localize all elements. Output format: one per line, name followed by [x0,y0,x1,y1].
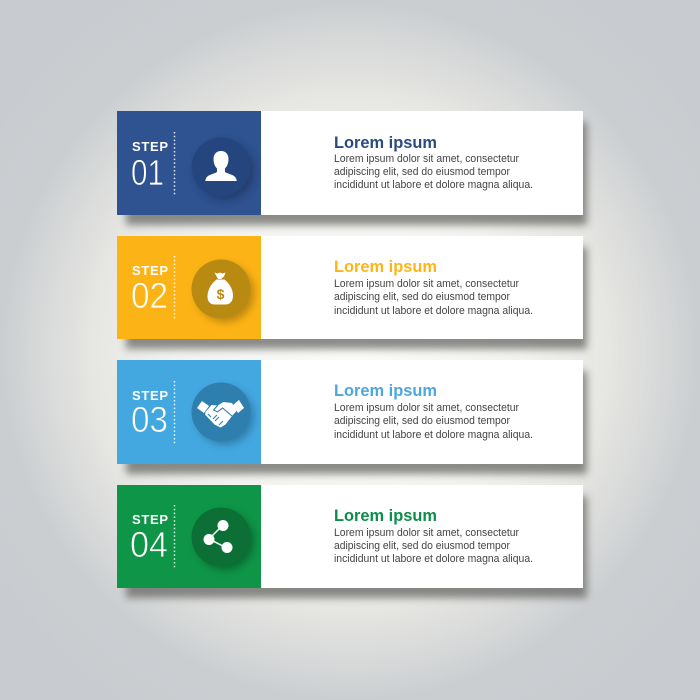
body text 4: incididunt ut labore et dolore magna aliqua. [334,553,533,565]
step label 1: STEP [132,139,168,154]
step label 3: STEP [132,388,168,403]
body text 2 [334,278,533,317]
body text 1: adipiscing elit, sed do eiusmod tempor [334,166,510,178]
body text 3: incididunt ut labore et dolore magna aliqua. [334,429,533,441]
body text 3: Lorem ipsum dolor sit amet, consectetur [334,402,519,414]
body text 1: incididunt ut labore et dolore magna aliqua. [334,179,533,191]
step number 3: 03 [131,399,168,440]
panel: step 3 [117,360,587,474]
icon: money bag [208,272,233,304]
icon: person [205,151,237,181]
heading 1: Lorem ipsum [334,133,437,152]
step number 2: 02 [131,275,168,316]
body text 3: adipiscing elit, sed do eiusmod tempor [334,415,510,427]
body text 4: Lorem ipsum dolor sit amet, consectetur [334,527,519,539]
step number 4: 04 [130,524,168,565]
body text 4 [334,527,533,565]
body text 2: incididunt ut labore et dolore magna aliqua. [334,305,533,317]
icon: handshake [197,400,244,428]
body text 1 [334,153,533,191]
heading 3: Lorem ipsum [334,381,437,400]
heading 2: Lorem ipsum [334,257,437,276]
body text 2: adipiscing elit, sed do eiusmod tempor [334,291,510,303]
step label 4: STEP [132,512,168,527]
icon: money bag: $ [217,286,225,302]
body text 2: Lorem ipsum dolor sit amet, consectetur [334,278,519,290]
panel: step 4 [117,485,587,598]
heading 4: Lorem ipsum [334,506,437,525]
body text 4: adipiscing elit, sed do eiusmod tempor [334,540,510,552]
body text 3 [334,402,533,441]
step label 2: STEP [132,263,168,278]
icon: share [204,520,232,553]
step number 1: 01 [131,152,164,193]
panel: step 1 [117,111,587,225]
panel: step 2 [117,236,587,349]
body text 1: Lorem ipsum dolor sit amet, consectetur [334,153,519,165]
